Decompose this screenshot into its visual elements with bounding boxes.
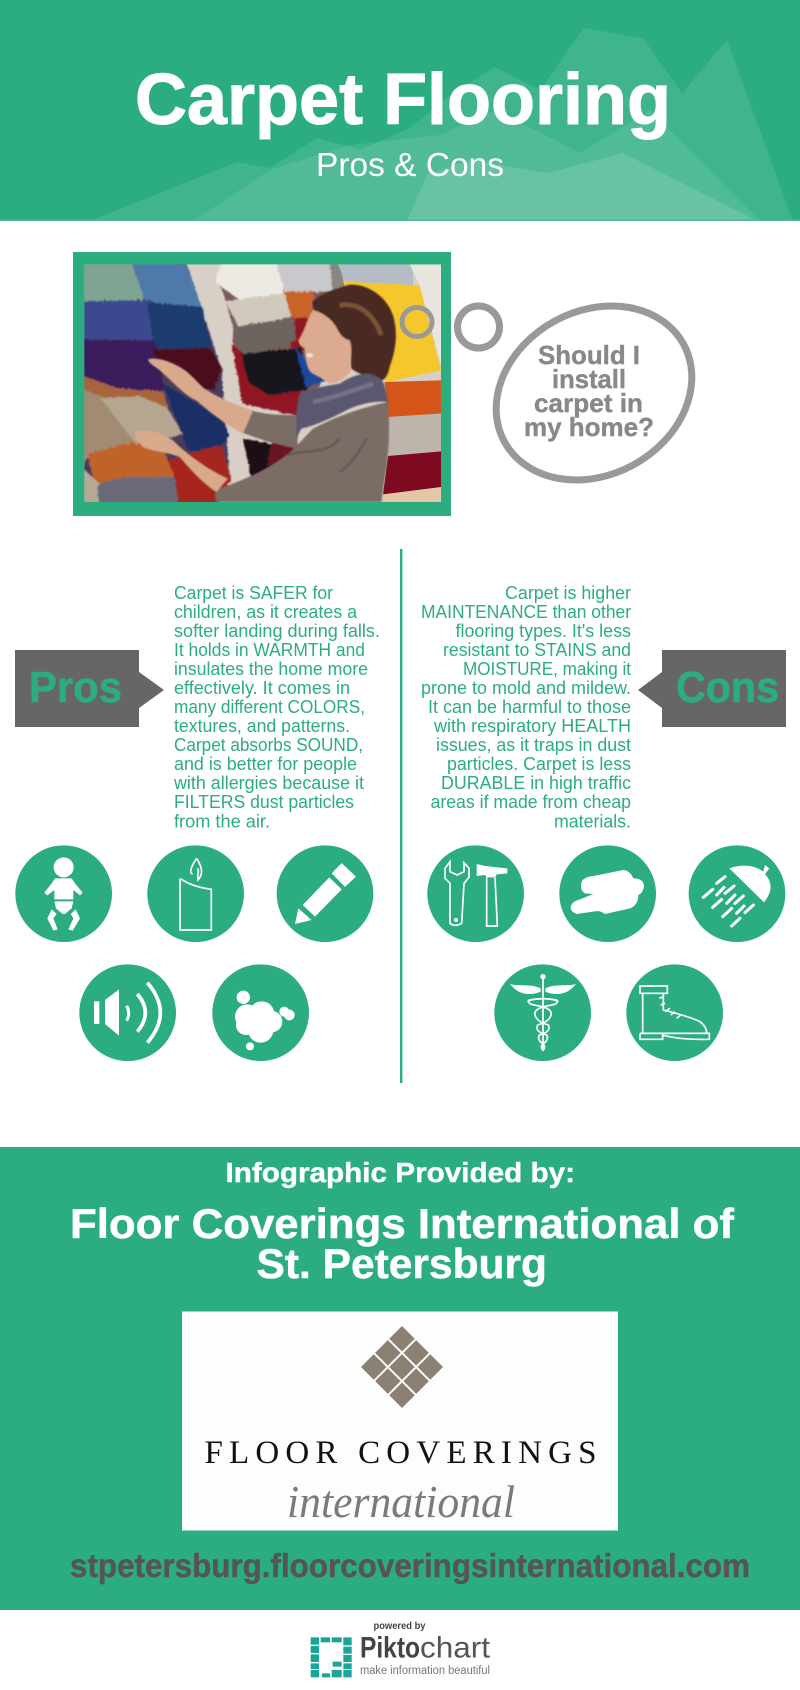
pros text: It holds in WARMTH and (174, 640, 365, 660)
provided by heading: Infographic Provided by: (226, 1157, 575, 1188)
cons text: flooring types. It's less (456, 621, 631, 641)
pros text: and is better for people (174, 754, 357, 774)
powered by piktochart: make information beautiful (360, 1665, 490, 1677)
pros text: from the air. (174, 812, 270, 832)
pros text: many different COLORS, (174, 697, 365, 717)
powered by piktochart: Pikto (360, 1632, 420, 1664)
question text: Should I (538, 340, 640, 370)
cons text: MAINTENANCE than other (421, 602, 631, 622)
company logo: international (287, 1476, 515, 1527)
thought bubble (402, 272, 723, 514)
cons text: resistant to STAINS and (443, 640, 631, 660)
cons label: Cons (676, 663, 779, 712)
pros text: effectively. It comes in (174, 678, 350, 698)
header banner (0, 0, 800, 221)
cons icons (427, 845, 785, 1061)
pros text: with allergies because it (173, 773, 364, 793)
question text: install (552, 364, 626, 394)
powered by piktochart: powered by (374, 1620, 426, 1632)
pros icons (15, 845, 373, 1061)
photo: woman touching carpet samples (73, 252, 451, 516)
icon: stain (559, 845, 656, 942)
cons text (421, 583, 631, 832)
icon: pencil (277, 845, 373, 942)
cons text: It can be harmful to those (428, 697, 631, 717)
cons text: areas if made from cheap (430, 792, 631, 812)
powered by piktochart: chart (420, 1632, 491, 1664)
cons text: prone to mold and mildew. (421, 678, 631, 698)
question text: carpet in (534, 388, 643, 418)
company name: Floor Coverings International of (70, 1200, 735, 1247)
company logo: FLOOR COVERINGS (204, 1435, 596, 1471)
pros text: softer landing during falls. (174, 621, 380, 641)
icon: candle (147, 845, 244, 942)
cons text: issues, as it traps in dust (436, 735, 631, 755)
powered by piktochart (311, 1620, 491, 1677)
subtitle: Pros & Cons (316, 146, 504, 183)
pros text: children, as it creates a (174, 602, 358, 622)
icon: shower (689, 845, 785, 942)
pros label: Pros (29, 663, 122, 712)
icon: caduceus (494, 964, 591, 1061)
icon: dust cloud (212, 964, 309, 1061)
website url: stpetersburg.floorcoveringsinternational.com (70, 1547, 750, 1584)
icon: boot (626, 964, 723, 1061)
pros label (15, 650, 164, 727)
pros text: insulates the home more (174, 659, 368, 679)
question text (524, 340, 654, 442)
pros text: FILTERS dust particles (174, 792, 354, 812)
icon: piktochart logo (311, 1637, 352, 1677)
pros text: Carpet is SAFER for (174, 583, 333, 603)
pros text (173, 583, 380, 832)
pros text: textures, and patterns. (174, 716, 350, 736)
title: Carpet Flooring (135, 60, 671, 140)
cons text: particles. Carpet is less (447, 754, 631, 774)
cons text: MOISTURE, making it (463, 659, 631, 679)
company name (70, 1200, 735, 1287)
icon: baby (15, 845, 112, 942)
icon: speaker (79, 964, 176, 1061)
cons label (638, 650, 786, 727)
cons text: with respiratory HEALTH (433, 716, 631, 736)
company name: St. Petersburg (256, 1240, 547, 1287)
center divider (400, 549, 402, 1083)
footer panel (0, 1147, 800, 1610)
cons text: materials. (554, 812, 631, 832)
icon: wrench and hammer (427, 845, 524, 942)
company logo (182, 1312, 618, 1530)
cons text: Carpet is higher (505, 583, 631, 603)
cons text: DURABLE in high traffic (441, 773, 631, 793)
question text: my home? (524, 412, 654, 442)
pros text: Carpet absorbs SOUND, (174, 735, 363, 755)
